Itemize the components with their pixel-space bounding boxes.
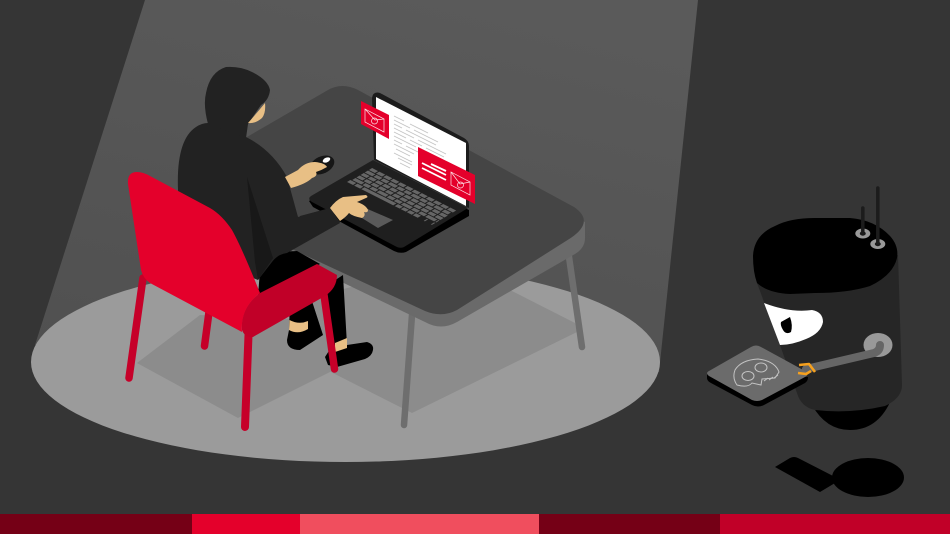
torso and arm xyxy=(178,123,340,280)
chair seat xyxy=(242,264,337,337)
small email card xyxy=(361,101,389,139)
hooded person xyxy=(178,67,340,280)
keyboard xyxy=(349,168,455,224)
hoodie fold xyxy=(247,177,273,280)
chair back xyxy=(128,172,260,332)
antennas xyxy=(855,188,885,249)
table edge xyxy=(230,100,585,326)
laptop base underside xyxy=(309,164,469,253)
near leg and shoe xyxy=(320,275,373,367)
floor shadows xyxy=(137,262,577,418)
table shadow xyxy=(300,262,577,413)
floor light pool xyxy=(31,262,660,462)
sleeve over laptop xyxy=(300,208,340,243)
robot eye xyxy=(764,303,823,345)
red chair xyxy=(129,251,337,427)
tablet xyxy=(707,346,808,406)
far leg and shoe xyxy=(287,295,323,350)
lap between chair parts xyxy=(258,251,320,296)
mouse xyxy=(307,152,337,178)
robot head top xyxy=(753,218,897,294)
code lines xyxy=(394,116,446,168)
hood xyxy=(205,67,270,138)
orange claw xyxy=(798,364,815,374)
chair legs xyxy=(129,278,334,427)
robot xyxy=(707,188,902,430)
message lines xyxy=(422,163,446,180)
robot arm xyxy=(806,345,880,369)
envelope icon xyxy=(365,109,384,132)
robot floor shadow xyxy=(775,457,904,497)
bottom colour band xyxy=(0,514,950,534)
screen xyxy=(376,97,466,206)
envelope icon xyxy=(451,172,470,195)
laptop xyxy=(309,93,475,253)
robot pupil xyxy=(781,317,792,333)
chair shadow xyxy=(137,315,330,418)
laptop base xyxy=(309,160,468,248)
table legs xyxy=(404,250,582,425)
skull icon xyxy=(734,359,779,386)
hand on mouse xyxy=(285,162,327,188)
person legs xyxy=(287,275,373,367)
robot body xyxy=(757,255,902,411)
hand on keyboard xyxy=(330,195,368,221)
spotlight beam xyxy=(35,0,698,400)
face xyxy=(248,103,265,123)
robot base xyxy=(812,400,891,430)
screen bezel xyxy=(372,93,469,208)
trackpad xyxy=(357,207,393,228)
shoulder joint xyxy=(864,333,892,357)
table xyxy=(224,86,585,425)
table top xyxy=(224,86,584,314)
large email card xyxy=(418,147,475,204)
